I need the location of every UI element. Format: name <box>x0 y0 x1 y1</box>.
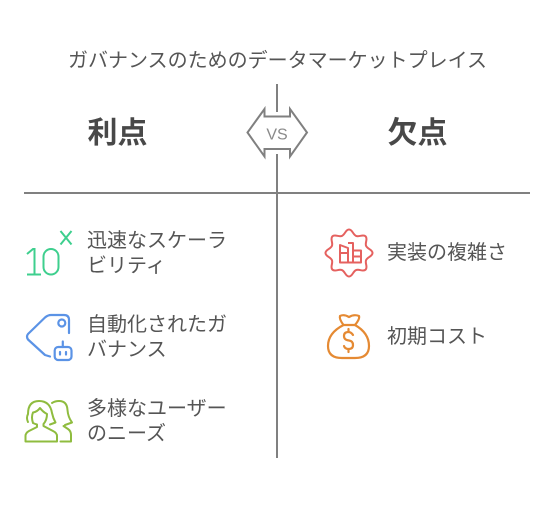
icon: people <box>26 401 72 442</box>
axis: vertical divider top <box>276 84 278 112</box>
text: initial cost: 初期コスト <box>387 325 487 348</box>
icon: vs double arrow: VS <box>266 126 288 144</box>
text: rapid scaling: 迅速なスケーラ <box>87 229 227 252</box>
icon: vs double arrow <box>248 109 307 156</box>
text: diverse user needs: のニーズ <box>87 422 166 445</box>
title: ガバナンスのためのデータマーケットプレイス <box>68 49 487 72</box>
axis: horizontal divider <box>24 192 530 194</box>
icon: 10x <box>27 231 72 274</box>
text: complexity: 実装の複雑さ <box>387 241 507 264</box>
text: diverse user needs: 多様なユーザー <box>87 397 227 420</box>
icon: money bag <box>328 315 369 358</box>
heading: disadvantages: 欠点 <box>388 117 448 150</box>
heading: advantages: 利点 <box>88 117 148 150</box>
icon: tag with robot <box>27 315 72 360</box>
text: automated governance: 自動化されたガ <box>87 313 227 336</box>
text: rapid scaling: ビリティ <box>87 254 166 277</box>
axis: vertical divider bottom <box>276 154 278 458</box>
icon: gear with book <box>326 230 372 276</box>
text: automated governance: バナンス <box>87 339 167 361</box>
